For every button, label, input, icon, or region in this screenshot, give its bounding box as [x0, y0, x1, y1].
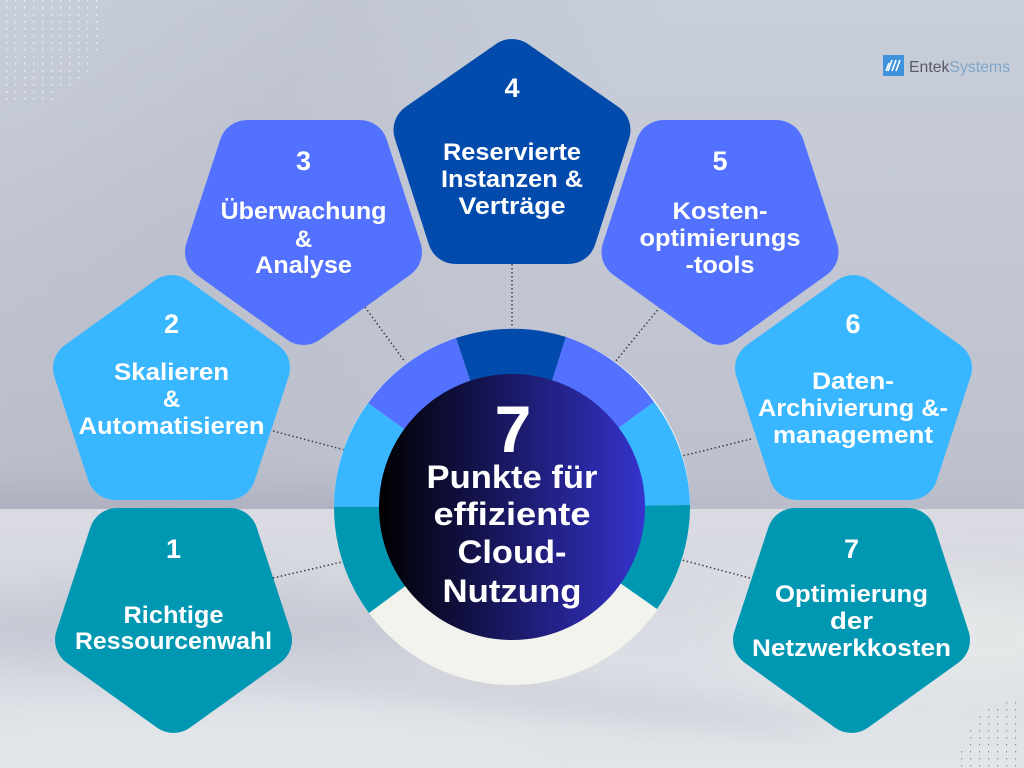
pentagon 3: Überwachung & Analyse: Analyse — [255, 252, 352, 279]
pentagon 7: Optimierung der Netzwerkkosten: Optimierung — [775, 581, 928, 608]
ring segment: light blue right — [512, 402, 690, 507]
pentagon 1: Richtige Ressourcenwahl: Ressourcenwahl — [75, 628, 272, 655]
pentagon 4: Reservierte Instanzen & Verträge: 4 — [504, 73, 520, 103]
pentagon 2: Skalieren & Automatisieren — [78, 303, 264, 472]
pentagon 5: Kostenoptimierungs-tools: Kosten- — [672, 198, 768, 225]
pentagon 1: Richtige Ressourcenwahl — [75, 534, 272, 705]
logo wordmark: EntekSystems — [909, 59, 1010, 76]
ring segment: light blue left — [334, 403, 512, 507]
ring segment: teal left — [334, 507, 512, 613]
pentagon 6: Daten-Archivierung &-management: Daten- — [812, 368, 894, 395]
ring segment: dark blue top — [456, 329, 566, 507]
pentagon 1: Richtige Ressourcenwahl: Richtige — [124, 602, 224, 629]
center circle with title: Nutzung — [442, 573, 582, 609]
pentagon 6: Daten-Archivierung &-management: management — [773, 422, 933, 449]
pentagon 5: Kostenoptimierungs-tools — [630, 146, 810, 317]
pentagon 1: Richtige Ressourcenwahl: 1 — [166, 534, 181, 564]
pentagon 2: Skalieren & Automatisieren: 2 — [164, 309, 179, 339]
pentagon 4: Reservierte Instanzen & Verträge: Verträge — [458, 193, 566, 220]
connector lines — [273, 264, 751, 578]
pentagon 5: Kostenoptimierungs-tools: optimierungs — [640, 225, 800, 252]
pentagon 3: Überwachung & Analyse — [213, 146, 394, 317]
pentagon 2: Skalieren & Automatisieren: Skalieren — [114, 359, 229, 386]
pentagon 3: Überwachung & Analyse: 3 — [296, 146, 311, 176]
central ring diagram — [334, 329, 690, 685]
pentagon 7: Optimierung der Netzwerkkosten — [752, 534, 951, 705]
pentagon 7: Optimierung der Netzwerkkosten: Netzwerkkosten — [752, 635, 951, 662]
pentagon 7: Optimierung der Netzwerkkosten: 7 — [844, 534, 859, 564]
center circle with title: Cloud- — [458, 534, 566, 570]
pentagon 3: Überwachung & Analyse: Überwachung — [220, 198, 386, 225]
pentagon 2: Skalieren & Automatisieren: Automatisieren — [78, 413, 264, 440]
ring segment: blue right — [512, 337, 654, 507]
pentagon 7: Optimierung der Netzwerkkosten: der — [830, 608, 873, 635]
background: wall and floor — [0, 161, 1024, 768]
pentagon 4: Reservierte Instanzen & Verträge — [422, 67, 602, 236]
pentagon 3: Überwachung & Analyse: & — [295, 226, 312, 253]
pentagon 5: Kostenoptimierungs-tools: 5 — [712, 146, 728, 176]
pentagon 6: Daten-Archivierung &-management: 6 — [845, 309, 861, 339]
pentagon 6: Daten-Archivierung &-management: Archivierung &- — [758, 395, 948, 422]
pentagon 4: Reservierte Instanzen & Verträge: Reservierte — [443, 139, 581, 166]
ring segment: teal right — [512, 505, 690, 609]
center circle with title: Punkte für — [426, 459, 598, 495]
center circle with title — [379, 374, 645, 640]
ring segment: cream base — [334, 329, 690, 685]
decorative dot grid: top left — [0, 0, 102, 102]
logo: Entek Systems — [883, 55, 1010, 76]
center circle with title: effiziente — [434, 496, 590, 532]
center circle with title: 7 — [495, 392, 531, 466]
pentagon 6: Daten-Archivierung &-management — [758, 303, 948, 472]
decorative dot grid: bottom right — [958, 699, 1024, 768]
icon: logo square — [883, 55, 904, 76]
pentagon 2: Skalieren & Automatisieren: & — [163, 386, 180, 413]
pentagon 4: Reservierte Instanzen & Verträge: Instanzen & — [441, 166, 583, 193]
pentagon 5: Kostenoptimierungs-tools: -tools — [686, 252, 754, 279]
ring segment: blue left — [368, 338, 512, 507]
